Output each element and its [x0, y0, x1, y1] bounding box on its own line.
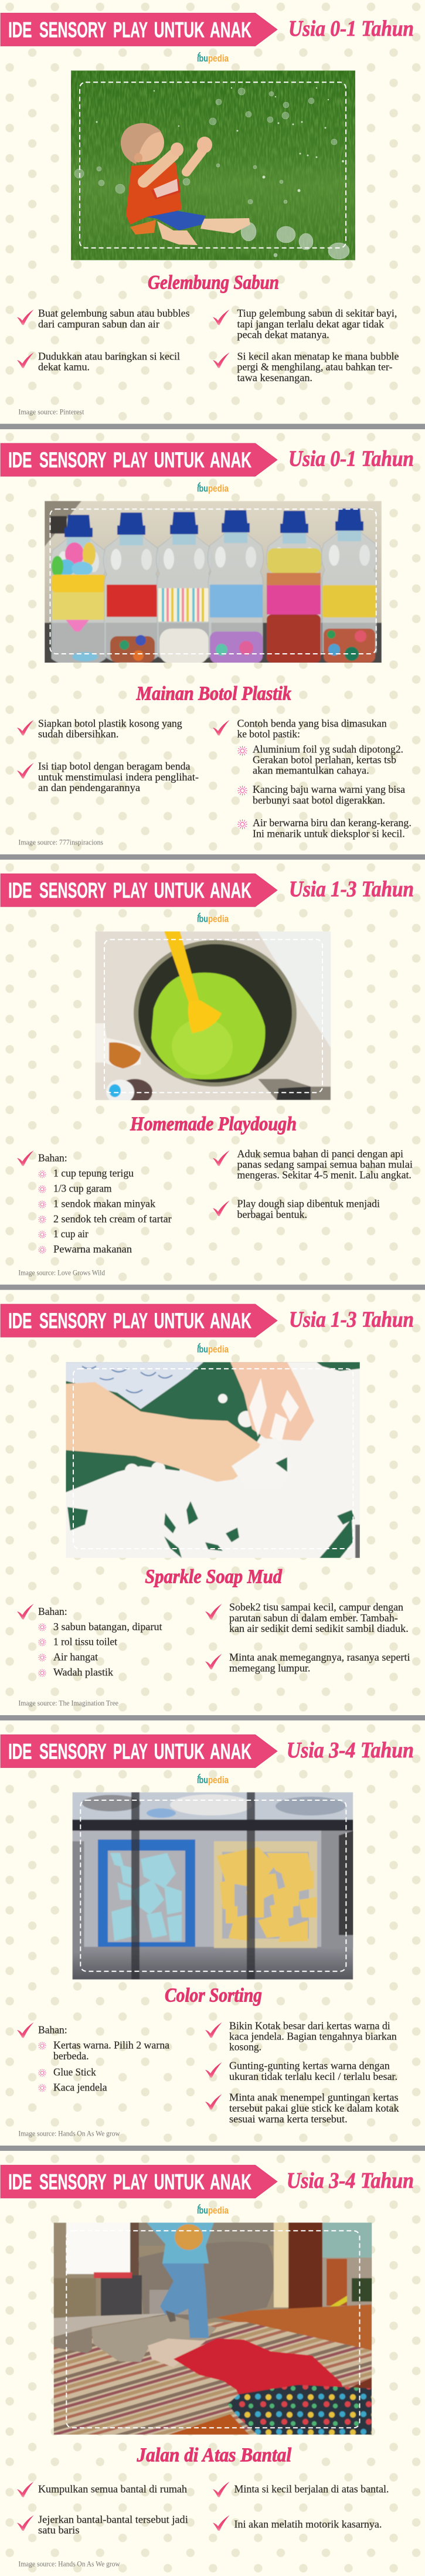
step: aduk: panas sedang sampai semua bahan mulai — [237, 1159, 413, 1170]
ingredients list — [17, 2022, 169, 2093]
header banner: IDE — [8, 1309, 32, 1333]
step: isi tiap botol: untuk menstimulasi indera penglihat- — [38, 771, 199, 783]
header banner: UNTUK — [154, 18, 205, 42]
step: buat gelembung: Buat gelembung sabun atau bubbles — [38, 307, 190, 319]
foam mass — [66, 1362, 360, 1558]
step: jejerkan: satu baris — [38, 2524, 80, 2536]
ingredients list: Bahan: — [38, 1152, 67, 1164]
wooden floor — [193, 2305, 372, 2351]
panel: Gelembung Sabun, age 0-1 — [0, 0, 425, 424]
list item: aluminium foil: akan memantulkan cahaya. — [253, 764, 369, 776]
ingredients list: 2 sendok teh cream of tartar — [53, 1213, 172, 1224]
header banner: IDE — [8, 878, 32, 902]
step: si kecil menatap — [213, 350, 399, 383]
activity title: Homemade Playdough — [130, 1113, 297, 1135]
bottle 4 — [208, 510, 264, 663]
step: minta si kecil — [213, 2482, 389, 2497]
logo: ibu — [197, 483, 208, 494]
list item: aluminium foil: Aluminium foil yg sudah dipotong2. — [253, 743, 403, 755]
step: gunting — [205, 2060, 397, 2082]
ingredients list: Bahan: — [38, 1606, 67, 1617]
header banner: SENSORY — [39, 1739, 107, 1763]
ingredients list — [17, 1604, 162, 1678]
cushions — [54, 2318, 92, 2353]
step: aduk: mengeras. Sekitar 4-5 menit. Lalu angkat. — [237, 1169, 412, 1181]
step: play dough siap — [213, 1198, 380, 1220]
step: tiup — [213, 307, 397, 341]
activity title: Sparkle Soap Mud — [145, 1566, 283, 1587]
step: bikin kotak: kaca jendela. Bagian tengahnya biarkan — [229, 2031, 397, 2042]
logo: ibu — [197, 2205, 208, 2216]
activity title: Gelembung Sabun — [148, 272, 279, 294]
step: isi tiap botol: Isi tiap botol dengan beragam benda — [38, 761, 191, 772]
logo: pedia — [208, 483, 229, 494]
baby — [121, 123, 250, 245]
ingredients list: Kertas warna. Pilih 2 warna — [53, 2039, 169, 2051]
logo: ibu — [197, 53, 208, 64]
header banner: SENSORY — [39, 1309, 107, 1333]
step: siapkan botol: Siapkan botol plastik kosong yang — [38, 717, 182, 729]
dotted background — [0, 429, 425, 854]
header banner — [1, 874, 277, 907]
ingredients list: 1 cup air — [53, 1228, 89, 1240]
step: contoh benda — [213, 717, 387, 740]
bottle 3 — [156, 512, 212, 664]
step: minta anak — [205, 1651, 410, 1674]
header banner: SENSORY — [39, 2170, 107, 2194]
logo: pedia — [208, 1344, 229, 1355]
step: tiup: Tiup gelembung sabun di sekitar bayi, — [237, 307, 397, 319]
step: dudukkan — [17, 350, 180, 373]
logo — [197, 2205, 229, 2216]
sofa — [138, 2241, 274, 2321]
step: dudukkan: Dudukkan atau baringkan si kecil — [38, 350, 180, 362]
header banner — [1, 1735, 277, 1767]
logo: pedia — [208, 53, 229, 64]
ingredients list: 1 sendok makan minyak — [53, 1197, 155, 1209]
header banner: ANAK — [210, 2170, 251, 2194]
step: minta anak: memegang lumpur. — [229, 1662, 310, 1674]
step: sobek tisu: parutan sabun di dalam ember. Tambah- — [229, 1612, 398, 1624]
ingredients list: 1 rol tissu toilet — [53, 1636, 117, 1648]
image source: Image source: Hands On As We grow — [18, 2129, 120, 2137]
step: play dough siap: Play dough siap dibentuk menjadi — [237, 1198, 380, 1210]
logo — [197, 913, 229, 925]
photo: six sensory plastic bottles — [45, 501, 382, 666]
header banner — [1, 1304, 277, 1337]
header banner: IDE — [8, 448, 32, 472]
dotted background — [0, 860, 425, 1284]
step: aduk: Aduk semua bahan di panci dengan api — [237, 1148, 403, 1159]
step: menempel: sesuai warna kerta tersebut. — [229, 2113, 348, 2124]
list item: air berwarna: Ini menarik untuk dieksplor si kecil. — [253, 827, 405, 839]
step: si kecil menatap: Si kecil akan menatap ke mana bubble — [237, 350, 399, 362]
ingredients list: Pewarna makanan — [53, 1243, 132, 1255]
image source: Image source: Love Grows Wild — [18, 1268, 106, 1277]
step: bikin kotak — [205, 2020, 397, 2053]
activity title: Jalan di Atas Bantal — [137, 2444, 292, 2466]
photo: green playdough in a pan — [95, 931, 331, 1105]
list item: kancing baju: Kancing baju warna warni yang bisa — [253, 783, 405, 795]
logo — [197, 1343, 229, 1355]
step: gunting: Gunting-gunting kertas warna dengan — [229, 2060, 390, 2072]
header banner: PLAY — [113, 1739, 148, 1763]
panel: Jalan di Atas Bantal, age 3-4 — [0, 2151, 425, 2576]
step: tiup: tapi jangan terlalu dekat agar tidak — [237, 318, 384, 330]
header banner: ANAK — [210, 1309, 251, 1333]
photo: colour sorting on window — [72, 1792, 353, 1980]
ingredients list: 3 sabun batangan, diparut — [53, 1621, 162, 1633]
logo: ibu — [197, 1344, 208, 1355]
logo: ibu — [197, 1774, 208, 1786]
photo: child walking on cushions — [54, 2222, 372, 2435]
bottle 2 — [103, 513, 159, 664]
panel: Color Sorting, age 3-4 — [0, 1720, 425, 2146]
logo: pedia — [208, 2205, 229, 2216]
image source: Image source: Hands On As We grow — [18, 2560, 120, 2568]
ingredients list: Air hangat — [53, 1651, 98, 1663]
step: menempel: Minta anak menempel guntingan kertas — [229, 2092, 399, 2103]
header banner: PLAY — [113, 448, 148, 472]
step: kumpulkan — [17, 2482, 187, 2497]
list item: aluminium foil — [237, 743, 403, 776]
image source: Image source: 777inspiracions — [18, 839, 103, 847]
header banner: PLAY — [113, 878, 148, 902]
step: bikin kotak: Bikin Kotak besar dari kertas warna di — [229, 2020, 390, 2031]
ingredients list: Bahan: — [38, 2024, 67, 2036]
dotted background — [0, 1720, 425, 2146]
step: isi tiap botol — [17, 761, 199, 793]
step: menempel — [205, 2092, 399, 2124]
step: contoh benda: Contoh benda yang bisa dimasukan — [237, 717, 387, 729]
step: aduk — [213, 1148, 413, 1181]
dashed border — [66, 2231, 360, 2428]
step: kumpulkan: Kumpulkan semua bantal di rumah — [38, 2483, 187, 2495]
step: dudukkan: dekat kamu. — [38, 361, 90, 373]
bottle 6 — [321, 508, 378, 663]
step: minta anak: Minta anak memegangnya, rasanya seperti — [229, 1651, 410, 1663]
pan handle — [258, 1079, 331, 1100]
age heading: Usia 3-4 Tahun — [287, 1738, 414, 1763]
blue paper frame — [98, 1839, 195, 1947]
logo: pedia — [208, 914, 229, 925]
step: si kecil menatap: pergi & menghilang, atau bahkan ter- — [237, 361, 392, 373]
dashed border — [104, 939, 322, 1092]
activity title: Mainan Botol Plastik — [136, 683, 291, 704]
bottle 5 — [266, 511, 322, 663]
dotted background — [0, 1290, 425, 1715]
ingredients list: 1 cup tepung terigu — [53, 1167, 134, 1179]
list item: air berwarna — [237, 817, 412, 839]
dashed border — [80, 1800, 346, 1971]
header banner — [1, 443, 277, 476]
list item: aluminium foil: Gerakan botol perlahan, kertas tsb — [253, 754, 396, 766]
step: play dough siap: berbagai bentuk. — [237, 1209, 307, 1220]
header banner: UNTUK — [154, 448, 205, 472]
step: sobek tisu — [205, 1601, 409, 1634]
step: siapkan botol: sudah dibersihkan. — [38, 728, 118, 740]
header banner — [1, 13, 277, 46]
image source: Image source: Pinterest — [18, 408, 84, 416]
step: minta si kecil: Minta si kecil berjalan di atas bantal. — [234, 2483, 389, 2495]
ingredients list: Glue Stick — [53, 2066, 96, 2078]
side table and left chair — [101, 2275, 142, 2316]
photo: baby with soap bubbles on grass — [71, 70, 355, 260]
header banner: PLAY — [113, 1309, 148, 1333]
header banner: UNTUK — [154, 1739, 205, 1763]
age heading: Usia 3-4 Tahun — [287, 2168, 414, 2193]
image source: Image source: The Imagination Tree — [18, 1699, 118, 1707]
step: melatih motorik — [213, 2515, 382, 2531]
ingredients list: Kaca jendela — [53, 2082, 107, 2093]
step: buat gelembung — [17, 307, 190, 330]
rug — [54, 2322, 372, 2435]
step: contoh benda: ke botol pastik: — [237, 728, 300, 740]
logo — [197, 1774, 229, 1786]
header banner: SENSORY — [39, 878, 107, 902]
green gaps in foam — [67, 1501, 355, 1558]
step: sobek tisu: kan air sedikit demi sedikit sambil diaduk. — [229, 1623, 409, 1634]
wood floor front — [168, 2414, 249, 2435]
step: gunting: ukuran tidak terlalu kecil / terlalu besar. — [229, 2071, 397, 2082]
logo: ibu — [197, 914, 208, 925]
ingredients list: berbeda. — [53, 2050, 89, 2062]
panel: Homemade Playdough, age 1-3 — [0, 860, 425, 1284]
panel: Mainan Botol Plastik, age 0-1 — [0, 429, 425, 854]
logo: pedia — [208, 1774, 229, 1786]
step: siapkan botol — [17, 717, 182, 740]
step: bikin kotak: kosong. — [229, 2041, 261, 2053]
header banner: ANAK — [210, 878, 251, 902]
panel: Sparkle Soap Mud, age 1-3 — [0, 1290, 425, 1715]
step: jejerkan — [17, 2513, 188, 2536]
header banner: IDE — [8, 2170, 32, 2194]
dashed border — [73, 1369, 353, 1549]
step: tiup: pecah dekat matanya. — [237, 329, 329, 341]
logo — [197, 483, 229, 494]
ingredients list: 1/3 cup garam — [53, 1182, 111, 1194]
spatula — [164, 931, 199, 1003]
food colouring bottle orange — [95, 1023, 141, 1068]
dashed border — [50, 509, 376, 654]
header banner: SENSORY — [39, 18, 107, 42]
food colouring bottle blue — [117, 1079, 152, 1105]
header banner: ANAK — [210, 18, 251, 42]
logo — [197, 53, 229, 64]
step: melatih motorik: Ini akan melatih motorik kasarnya. — [234, 2518, 382, 2530]
step: jejerkan: Jejerkan bantal-bantal tersebut jadi — [38, 2513, 188, 2525]
header banner: ANAK — [210, 1739, 251, 1763]
ingredients list — [17, 1150, 172, 1255]
step: sobek tisu: Sobek2 tisu sampai kecil, campur dengan — [229, 1601, 403, 1613]
bottle 1 — [50, 515, 107, 666]
list item: air berwarna: Air berwarna biru dan kerang-kerang. — [253, 817, 412, 829]
dashed border — [80, 82, 346, 248]
header banner: UNTUK — [154, 878, 205, 902]
header banner: SENSORY — [39, 448, 107, 472]
dotted background — [0, 0, 425, 424]
header banner: PLAY — [113, 2170, 148, 2194]
step: si kecil menatap: tawa kesenangan. — [237, 372, 312, 383]
header banner — [1, 2165, 277, 2198]
step: menempel: tersebut pakai glue stick ke dalam kotak — [229, 2102, 399, 2114]
child — [147, 2222, 214, 2338]
dotted background — [0, 2151, 425, 2576]
yellow paper frame — [214, 1841, 317, 1948]
header banner: UNTUK — [154, 1309, 205, 1333]
step: buat gelembung: dari campuran sabun dan air — [38, 318, 159, 330]
header banner: IDE — [8, 1739, 32, 1763]
header banner: UNTUK — [154, 2170, 205, 2194]
header banner: PLAY — [113, 18, 148, 42]
list item: kancing baju — [237, 783, 405, 806]
list item: kancing baju: berbunyi saat botol digerakkan. — [253, 794, 385, 806]
activity title: Color Sorting — [165, 1984, 262, 2006]
photo: hands in soap foam — [66, 1362, 360, 1558]
ingredients list: Wadah plastik — [53, 1667, 113, 1678]
step: isi tiap botol: an dan pendengarannya — [38, 782, 140, 793]
header banner: IDE — [8, 18, 32, 42]
header banner: ANAK — [210, 448, 251, 472]
